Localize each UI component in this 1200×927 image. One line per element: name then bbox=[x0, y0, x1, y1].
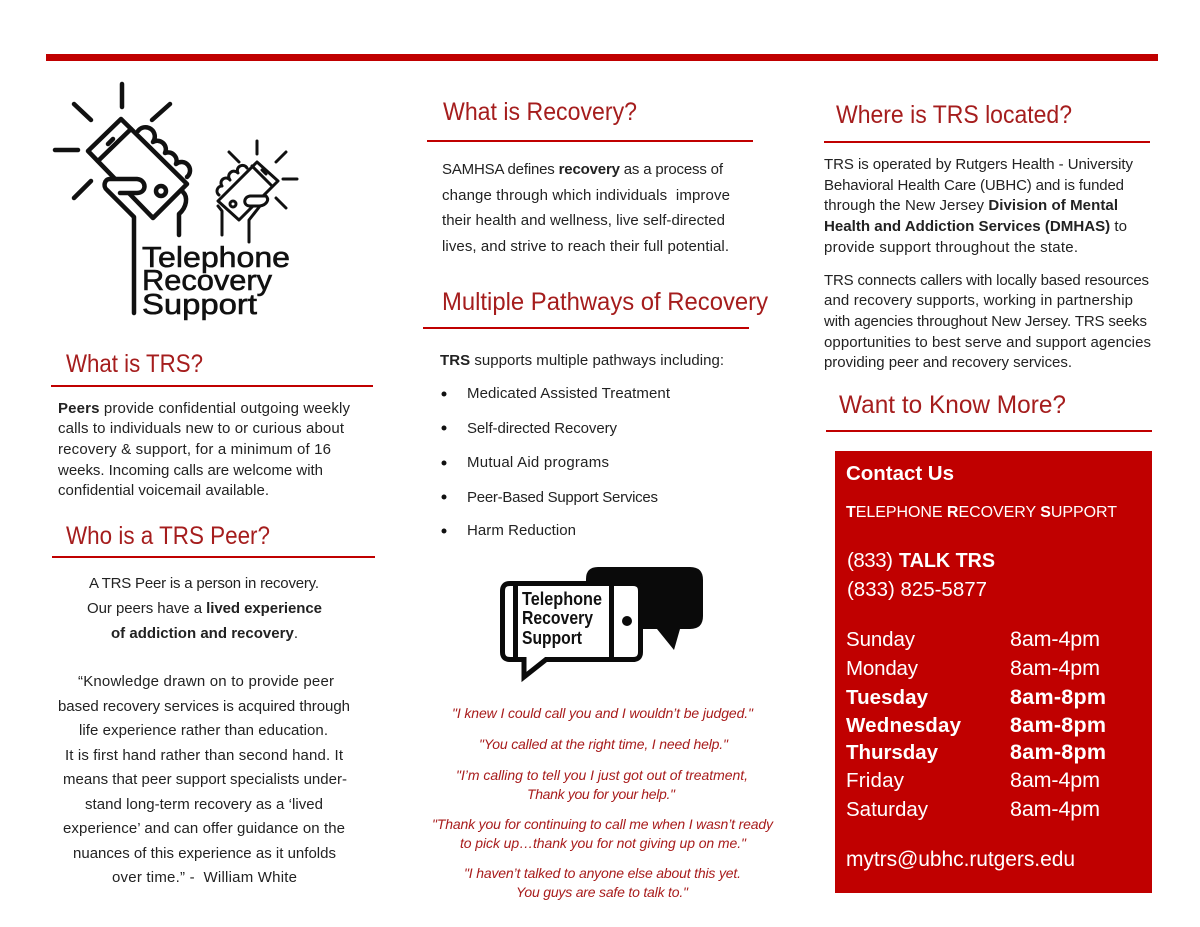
text block: pathways intro: TRS supports multiple pathways including: bbox=[440, 352, 724, 369]
text block: peers description: weeks. Incoming calls are welcome with bbox=[57, 462, 323, 479]
text block: operator and funding: TRS is operated by Rutgers Health - University bbox=[824, 156, 1134, 173]
opening hours: 8am-8pm bbox=[1010, 740, 1106, 764]
text block: William White quote: over time.” - William White bbox=[112, 869, 297, 886]
text block: William White quote: It is first hand rather than second hand. It bbox=[65, 747, 344, 764]
opening hours: 8am-8pm bbox=[1010, 685, 1106, 709]
text block: caller testimonials: "Thank you for continuing to call me when I wasn’t ready bbox=[432, 816, 774, 832]
logo wordmark bbox=[142, 242, 290, 321]
phone numbers bbox=[847, 549, 995, 601]
text block: peer definition: of addiction and recovery. bbox=[111, 625, 298, 642]
text block: peers description: calls to individuals new to or curious about bbox=[58, 420, 345, 437]
panel: multiple pathways of recovery bbox=[423, 288, 768, 539]
opening hours: 8am-8pm bbox=[1010, 713, 1106, 737]
phone numbers: (833) 825-5877 bbox=[847, 578, 987, 601]
text block: operator and funding: Health and Addiction Services (DMHAS) to bbox=[824, 218, 1127, 235]
text block: SAMHSA definition: lives, and strive to reach their full potential. bbox=[442, 238, 729, 255]
text block: partnerships bbox=[823, 272, 1151, 371]
icon: speech bubbles phone logo: Support bbox=[522, 627, 582, 648]
heading: who is a TRS peer: Who is a TRS Peer? bbox=[66, 522, 270, 550]
text block: peer definition bbox=[87, 575, 322, 642]
opening hours: 8am-4pm bbox=[1010, 656, 1100, 680]
opening hours: Friday bbox=[846, 769, 905, 792]
text block: caller testimonials bbox=[432, 705, 774, 900]
text block: SAMHSA definition bbox=[442, 161, 730, 255]
opening hours: 8am-4pm bbox=[1010, 797, 1100, 821]
text block: partnerships: providing peer and recovery services. bbox=[824, 354, 1072, 371]
heading: multiple pathways: Multiple Pathways of Recovery bbox=[442, 288, 768, 316]
opening hours: Monday bbox=[846, 657, 919, 680]
opening hours: Saturday bbox=[846, 798, 929, 821]
text block: caller testimonials: "I knew I could call you and I wouldn’t be judged." bbox=[452, 705, 754, 721]
text block: peers description: Peers provide confidential outgoing weekly bbox=[58, 400, 350, 417]
list: pathways: Mutual Aid programs bbox=[467, 454, 609, 471]
logo: Telephone Recovery Support hands and phones bbox=[55, 84, 297, 321]
icon: large hand holding phone bbox=[55, 84, 190, 313]
text block: William White quote: nuances of this experience as it unfolds bbox=[73, 845, 336, 862]
opening hours: Wednesday bbox=[846, 714, 962, 737]
text block: operator and funding: provide support throughout the state. bbox=[824, 239, 1078, 256]
icon: speech bubbles phone logo: Telephone bbox=[522, 588, 602, 609]
top red bar bbox=[46, 54, 1158, 61]
panel: what is TRS bbox=[51, 350, 373, 499]
text block: William White quote: experience’ and can offer guidance on the bbox=[63, 820, 345, 837]
program name: TELEPHONE RECOVERY SUPPORT bbox=[846, 504, 1117, 521]
text block: SAMHSA definition: change through which individuals improve bbox=[442, 187, 730, 204]
text block: operator and funding: Behavioral Health Care (UBHC) and is funded bbox=[824, 177, 1124, 194]
list: pathways: Peer-Based Support Services bbox=[467, 489, 658, 506]
list: pathways bbox=[442, 385, 671, 539]
text block: peer definition: Our peers have a lived experience bbox=[87, 600, 322, 617]
contact heading: Contact Us bbox=[846, 462, 954, 485]
email: mytrs@ubhc.rutgers.edu bbox=[846, 848, 1075, 871]
phone numbers: TALK TRS bbox=[899, 549, 995, 572]
icon: speech bubbles phone logo bbox=[502, 567, 703, 677]
phone numbers: (833) bbox=[847, 549, 893, 572]
text block: William White quote: means that peer support specialists under- bbox=[63, 771, 347, 788]
text block: William White quote: based recovery services is acquired through bbox=[58, 698, 350, 715]
icon: speech bubbles phone logo: Recovery bbox=[522, 607, 594, 628]
opening hours: 8am-4pm bbox=[1010, 627, 1100, 651]
panel: who is a TRS peer bbox=[52, 522, 375, 886]
text block: caller testimonials: "I’m calling to tell you I just got out of treatment, bbox=[456, 767, 748, 783]
text block: peers description bbox=[57, 400, 350, 499]
heading: what is recovery: What is Recovery? bbox=[443, 98, 637, 126]
text block: caller testimonials: "You called at the right time, I need help." bbox=[479, 736, 729, 752]
text block: William White quote bbox=[58, 673, 350, 886]
panel: contact us bbox=[835, 451, 1152, 893]
list: pathways: Medicated Assisted Treatment bbox=[467, 385, 671, 402]
heading: want to know more: Want to Know More? bbox=[839, 391, 1066, 419]
text block: SAMHSA definition: SAMHSA defines recovery as a process of bbox=[442, 161, 724, 178]
text block: partnerships: with agencies throughout New Jersey. TRS seeks bbox=[823, 313, 1147, 330]
panel: what is recovery bbox=[427, 98, 753, 255]
list: pathways: Self-directed Recovery bbox=[467, 420, 618, 437]
text block: caller testimonials: You guys are safe to talk to." bbox=[516, 884, 689, 900]
text block: operator and funding bbox=[824, 156, 1134, 256]
text block: peers description: confidential voicemail available. bbox=[58, 482, 269, 499]
text block: William White quote: “Knowledge drawn on to provide peer bbox=[78, 673, 334, 690]
text block: William White quote: stand long-term recovery as a ‘lived bbox=[85, 796, 323, 813]
list: pathways: Harm Reduction bbox=[467, 522, 576, 539]
heading: where is TRS located: Where is TRS located? bbox=[836, 101, 1072, 129]
text block: partnerships: TRS connects callers with locally based resources bbox=[824, 272, 1149, 289]
text block: partnerships: opportunities to best serve and support agencies bbox=[824, 334, 1151, 351]
logo wordmark: Recovery bbox=[142, 265, 273, 297]
logo wordmark: Support bbox=[142, 289, 257, 321]
text block: operator and funding: through the New Jersey Division of Mental bbox=[824, 197, 1118, 214]
opening hours: Thursday bbox=[846, 741, 939, 764]
heading: what is TRS: What is TRS? bbox=[66, 350, 203, 378]
text block: partnerships: and recovery supports, working in partnership bbox=[824, 292, 1133, 309]
icon: small hand holding phone bbox=[217, 141, 297, 242]
text block: peers description: recovery & support, for a minimum of 16 bbox=[58, 441, 331, 458]
opening hours: Sunday bbox=[846, 628, 916, 651]
opening hours: Tuesday bbox=[846, 686, 929, 709]
text block: peer definition: A TRS Peer is a person in recovery. bbox=[89, 575, 319, 592]
text block: caller testimonials: "I haven’t talked to anyone else about this yet. bbox=[464, 865, 741, 881]
text block: caller testimonials: Thank you for your help." bbox=[527, 786, 676, 802]
opening hours bbox=[846, 627, 1106, 821]
text block: William White quote: life experience rather than education. bbox=[79, 722, 328, 739]
text block: SAMHSA definition: their health and wellness, live self-directed bbox=[442, 212, 725, 229]
panel: where is TRS located bbox=[823, 101, 1151, 371]
opening hours: 8am-4pm bbox=[1010, 768, 1100, 792]
text block: caller testimonials: to pick up…thank you for not giving up on me." bbox=[460, 835, 747, 851]
logo wordmark: Telephone bbox=[142, 242, 290, 274]
